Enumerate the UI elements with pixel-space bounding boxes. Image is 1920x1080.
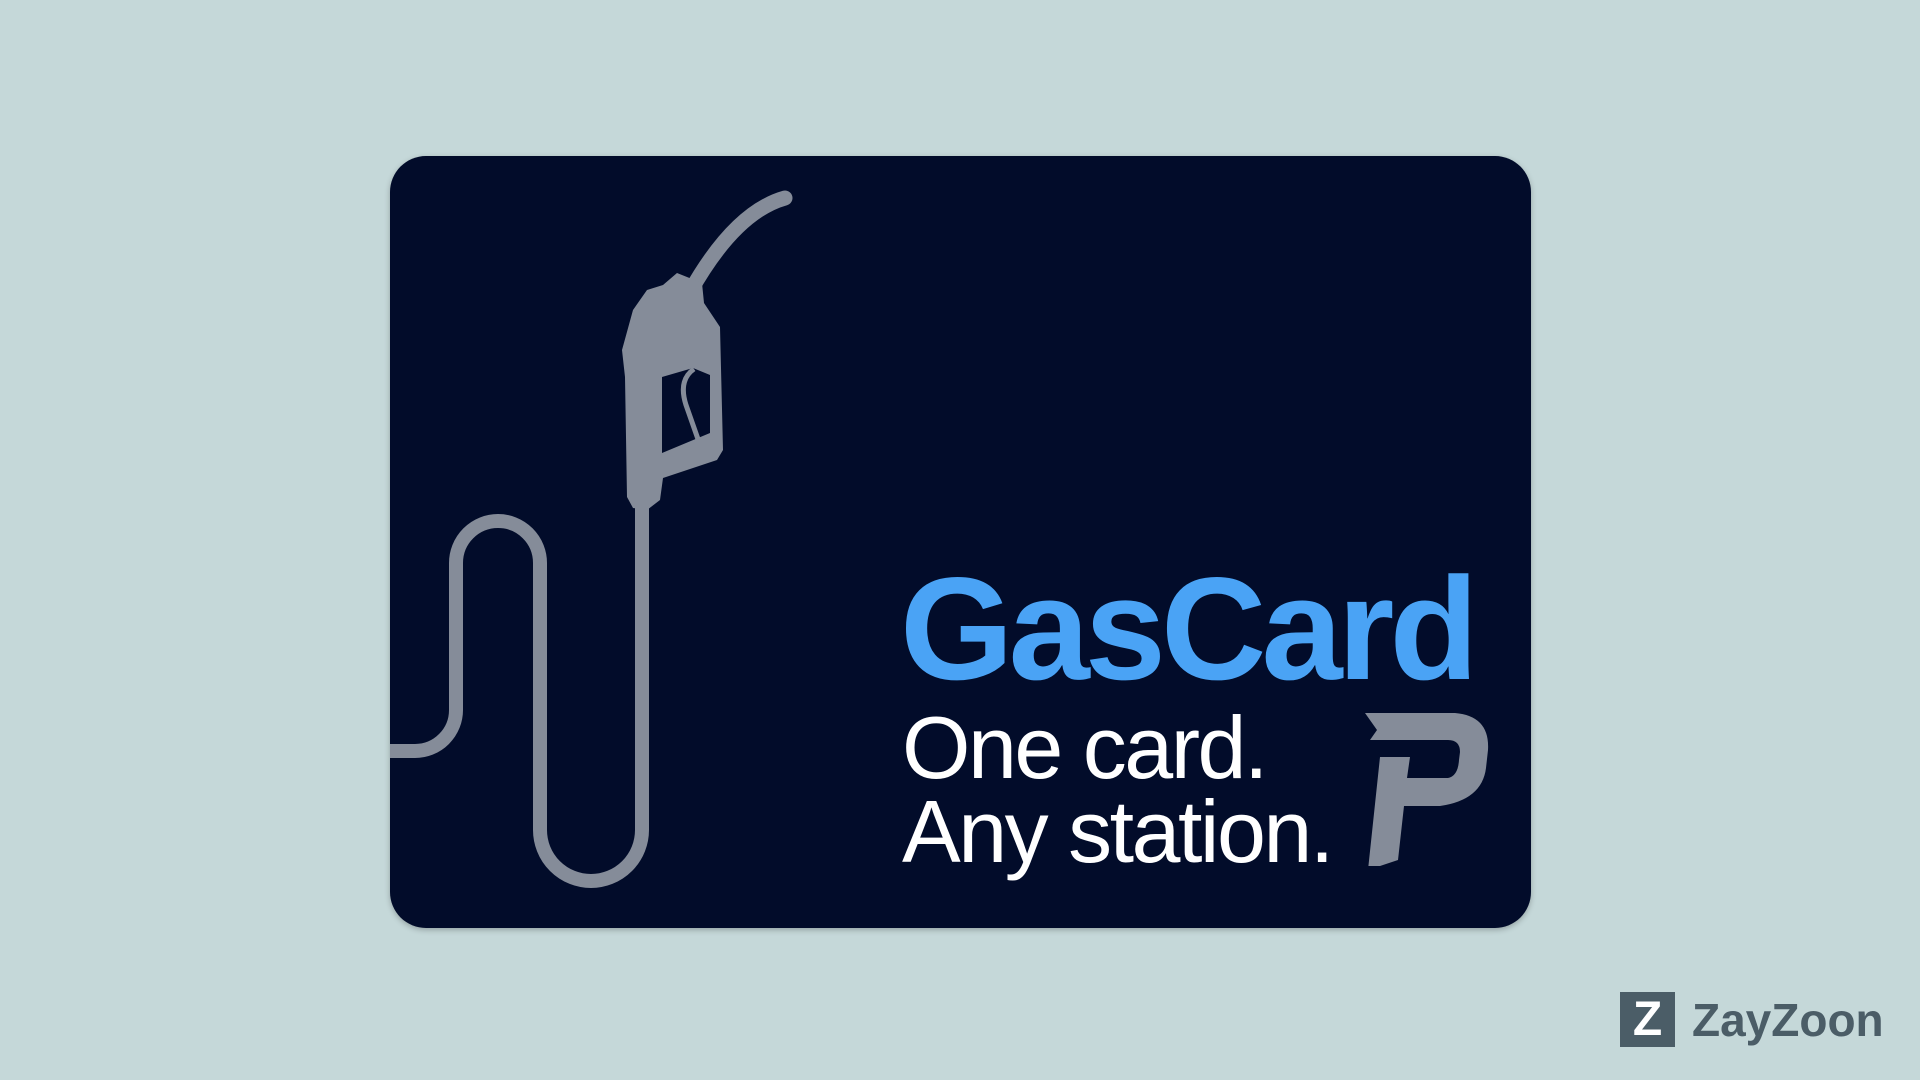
- icon: Z square: Z: [1633, 993, 1662, 1046]
- icon: fuel nozzle with hose: [390, 190, 792, 888]
- icon: P logo: [1365, 713, 1488, 866]
- icon: Z square: [1620, 992, 1675, 1047]
- text block: tagline: One card.: [902, 698, 1266, 797]
- panel: gas card: [390, 156, 1531, 928]
- logo: ZayZoon: [1620, 992, 1884, 1047]
- text: ZayZoon: ZayZoon: [1692, 994, 1884, 1046]
- text block: tagline: Any station.: [902, 782, 1332, 881]
- text block: tagline: [902, 698, 1332, 881]
- title: GasCard: GasCard: [900, 547, 1474, 710]
